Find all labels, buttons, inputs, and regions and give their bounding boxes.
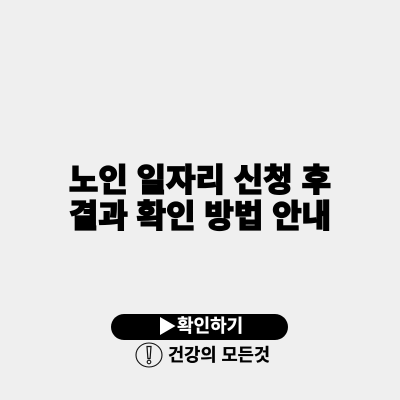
icon: exclamation circle bbox=[135, 342, 163, 368]
button: confirm bbox=[111, 314, 288, 340]
brand name: 건강의 모든것 bbox=[168, 345, 270, 365]
button label: 확인하기 bbox=[177, 316, 243, 336]
brand: icon and name bbox=[135, 342, 270, 368]
icon: play triangle bbox=[160, 317, 176, 335]
title: 노인 일자리 신청 후 bbox=[69, 162, 331, 198]
title: 결과 확인 방법 안내 bbox=[69, 198, 331, 234]
title bbox=[69, 162, 331, 234]
